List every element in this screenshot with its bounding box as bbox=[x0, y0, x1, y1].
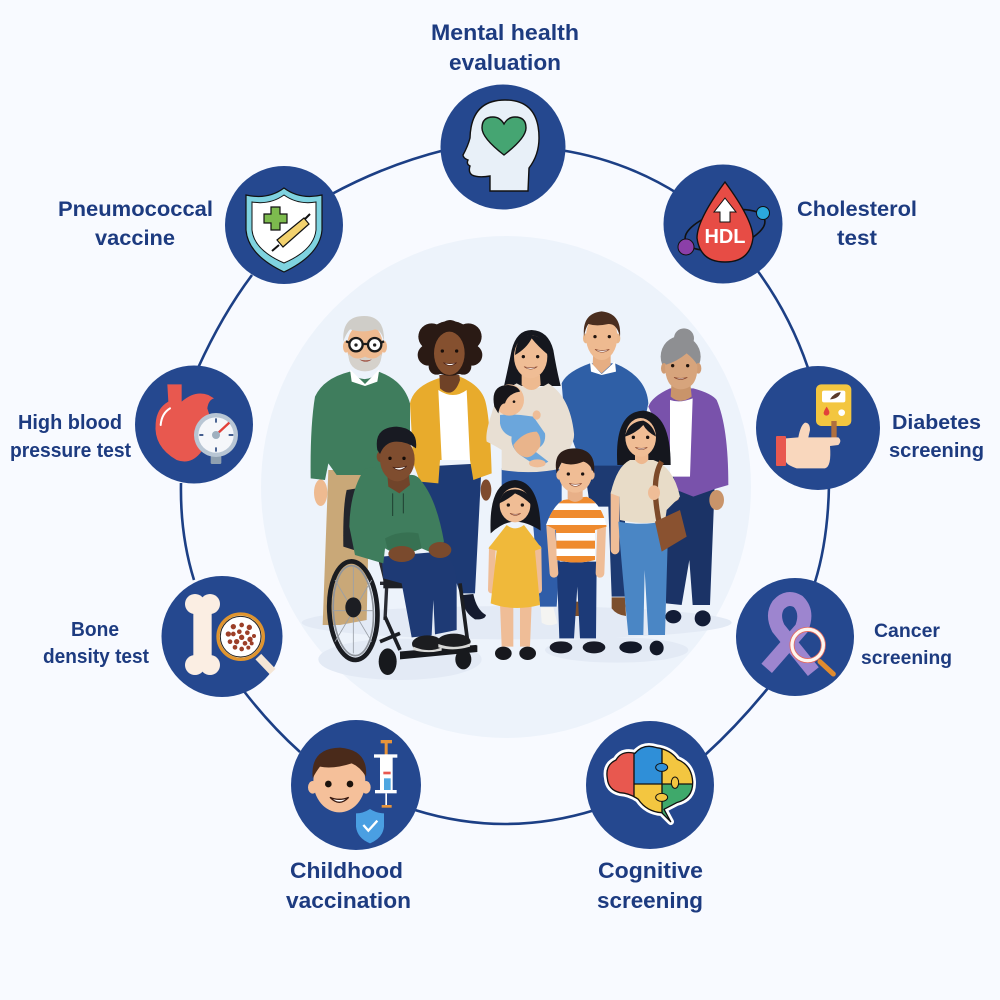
label: cancer screening: screening bbox=[861, 648, 952, 669]
node: pneumococcal vaccine bbox=[225, 166, 343, 284]
icon: shield with cross and syringe bbox=[246, 188, 322, 272]
label: bone density test: density test bbox=[43, 646, 149, 668]
central backdrop circle bbox=[261, 236, 751, 738]
label: diabetes screening bbox=[889, 412, 984, 462]
label: high blood pressure test: pressure test bbox=[10, 440, 131, 462]
node: cholesterol test bbox=[664, 164, 782, 284]
label: cholesterol test: Cholesterol bbox=[797, 198, 917, 221]
label: cancer screening: Cancer bbox=[874, 621, 941, 642]
label: cognitive screening bbox=[597, 858, 703, 913]
label: childhood vaccination bbox=[286, 858, 411, 913]
node: mental health evaluation bbox=[440, 84, 566, 210]
icon: child with syringe and shield bbox=[308, 740, 397, 843]
label: pneumococcal vaccine: vaccine bbox=[95, 227, 175, 250]
person: girl in yellow dress bbox=[488, 480, 542, 660]
baby bbox=[494, 384, 548, 467]
label: childhood vaccination: vaccination bbox=[286, 888, 411, 913]
label: mental health evaluation: Mental health bbox=[431, 20, 579, 45]
label: high blood pressure test bbox=[10, 412, 131, 462]
label: high blood pressure test: High blood bbox=[18, 412, 122, 434]
connecting ring bbox=[181, 150, 829, 824]
icon: finger on glucose meter bbox=[776, 384, 851, 468]
person: woman holding a baby bbox=[486, 330, 574, 625]
label: mental health evaluation bbox=[431, 20, 579, 75]
person: woman in yellow cardigan bbox=[410, 320, 492, 619]
icon: head with heart bbox=[463, 100, 539, 191]
node: cognitive screening bbox=[586, 721, 714, 849]
node: bone density test bbox=[162, 576, 282, 697]
icon: awareness ribbon and magnifier bbox=[767, 599, 833, 674]
person: older woman in purple cardigan bbox=[648, 328, 728, 626]
person: young man in wheelchair bbox=[349, 427, 471, 653]
person: older man in green sweater bbox=[311, 316, 410, 625]
label: cholesterol test bbox=[797, 198, 917, 250]
label: cognitive screening: screening bbox=[597, 888, 703, 913]
node: childhood vaccination bbox=[291, 720, 421, 850]
icon: bone and magnifier bbox=[185, 594, 273, 675]
label: bone density test bbox=[43, 619, 149, 668]
label: bone density test: Bone bbox=[71, 619, 119, 641]
wheelchair bbox=[327, 488, 477, 675]
icon: HDL blood drop: HDL bbox=[704, 226, 746, 248]
label: cancer screening bbox=[861, 621, 952, 669]
label: diabetes screening: Diabetes bbox=[892, 412, 981, 434]
person: teen girl with shoulder bag bbox=[611, 411, 687, 655]
label: cholesterol test: test bbox=[837, 227, 877, 250]
label: cognitive screening: Cognitive bbox=[598, 858, 703, 883]
node: diabetes screening bbox=[756, 366, 880, 490]
group of people bbox=[302, 311, 732, 680]
label: diabetes screening: screening bbox=[889, 440, 984, 462]
person: man in blue sweater bbox=[562, 311, 648, 616]
label: pneumococcal vaccine: Pneumococcal bbox=[58, 198, 213, 221]
label: childhood vaccination: Childhood bbox=[290, 858, 403, 883]
label: pneumococcal vaccine bbox=[58, 198, 213, 250]
person: boy in striped shirt bbox=[543, 448, 610, 653]
node: cancer screening bbox=[736, 578, 854, 696]
label: mental health evaluation: evaluation bbox=[449, 50, 561, 75]
icon: heart with pressure gauge bbox=[155, 384, 238, 464]
node: high blood pressure test bbox=[135, 366, 253, 484]
icon: puzzle brain bbox=[603, 743, 695, 824]
ground shadows bbox=[302, 606, 732, 680]
